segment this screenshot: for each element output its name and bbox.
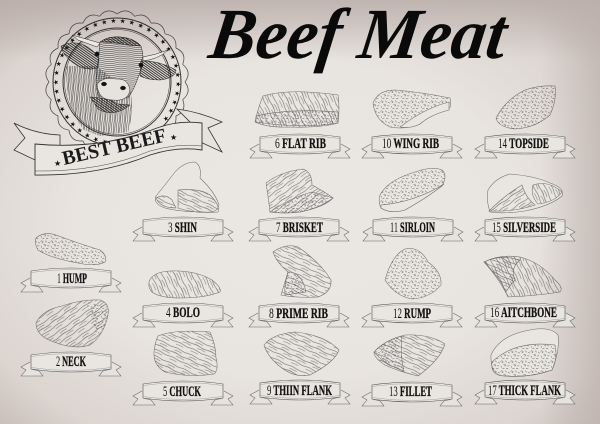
rump cut drawing [385, 249, 441, 299]
chuck banner [133, 381, 233, 405]
topside label: 14 TOPSIDE [498, 136, 549, 152]
ribbon band [35, 122, 202, 175]
hump banner [21, 268, 121, 292]
prime rib banner [249, 303, 349, 327]
panel: 17 thick flank [475, 329, 575, 404]
wing rib cut drawing [373, 90, 451, 128]
flat rib banner [250, 134, 350, 158]
prime rib cut drawing [273, 246, 331, 297]
ribbon text: BEST BEEF [60, 125, 168, 170]
bolo banner [133, 303, 233, 327]
fillet banner [362, 382, 462, 406]
thick flank banner [475, 380, 575, 404]
badge rings [53, 18, 181, 146]
panel: 16 aitchbone [475, 256, 575, 327]
bolo cut drawing [149, 271, 220, 298]
ribbon star right: ★ [170, 133, 177, 142]
silverside label: 15 SILVERSIDE [492, 220, 556, 236]
sirloin banner [363, 217, 463, 241]
thin flank banner [250, 380, 350, 404]
chuck cut drawing [154, 331, 217, 376]
sirloin label: 11 SIRLOIN [390, 220, 435, 236]
panel: 15 silverside [475, 174, 575, 241]
ribbon tails [14, 109, 222, 160]
rump label: 12 RUMP [393, 306, 431, 322]
panel: 13 fillet [362, 335, 462, 406]
brisket banner [249, 217, 349, 241]
fillet label: 13 FILLET [389, 384, 432, 400]
panel: 12 rump [362, 249, 462, 327]
sirloin cut drawing [379, 168, 445, 212]
neck label: 2 NECK [56, 354, 86, 370]
badge scalloped edge [44, 9, 190, 155]
flat rib cut drawing [255, 92, 339, 127]
panel: 11 sirloin [363, 168, 463, 241]
topside banner [475, 134, 575, 158]
brisket cut drawing [266, 169, 333, 213]
aitchbone label: 16 AITCHBONE [490, 305, 557, 321]
panel: 4 bolo [133, 271, 233, 327]
shin label: 3 SHIN [168, 220, 197, 236]
ring of stars: ★★★★★★★★★★★★★★★★★★★★★★★★★★★★★★★★★★★★ [54, 18, 180, 142]
shin cut drawing [155, 162, 219, 212]
panel: 1 hump [21, 234, 121, 292]
fillet cut drawing [374, 335, 445, 376]
shin banner [133, 217, 233, 241]
neck cut drawing [36, 300, 108, 347]
topside cut drawing [496, 86, 555, 129]
panel: 5 chuck [133, 331, 233, 405]
prime rib label: 8 PRIME RIB [269, 306, 328, 322]
hump cut drawing [35, 234, 106, 265]
wing rib banner [362, 134, 462, 158]
silverside banner [475, 217, 575, 241]
bolo label: 4 BOLO [166, 305, 200, 321]
brisket label: 7 BRISKET [276, 220, 323, 236]
wing rib label: 10 WING RIB [382, 136, 439, 152]
aitchbone banner [475, 303, 575, 327]
rump banner [362, 303, 462, 327]
panel: 3 shin [133, 162, 233, 241]
panel: 14 topside [475, 86, 575, 158]
badge: best beef [13, 10, 223, 176]
neck banner [21, 352, 121, 376]
hump label: 1 HUMP [57, 271, 87, 287]
aitchbone cut drawing [484, 256, 561, 297]
panel: 2 neck [21, 300, 121, 376]
flat rib label: 6 FLAT RIB [275, 136, 326, 152]
ribbon star left: ★ [54, 159, 61, 168]
panel: 7 brisket [249, 169, 349, 241]
thick flank label: 17 THICK FLANK [488, 383, 561, 399]
silverside cut drawing [487, 174, 562, 213]
panel: 6 flat rib [250, 92, 350, 158]
thin flank cut drawing [264, 332, 339, 376]
panel: 10 wing rib [362, 90, 462, 158]
thin flank label: 9 THIIN FLANK [267, 383, 332, 399]
icon: cow head [61, 35, 176, 136]
chuck label: 5 CHUCK [163, 384, 201, 400]
panel: 9 thin flank [250, 332, 350, 404]
thick flank cut drawing [491, 329, 558, 376]
panel: 8 prime rib [249, 246, 349, 327]
